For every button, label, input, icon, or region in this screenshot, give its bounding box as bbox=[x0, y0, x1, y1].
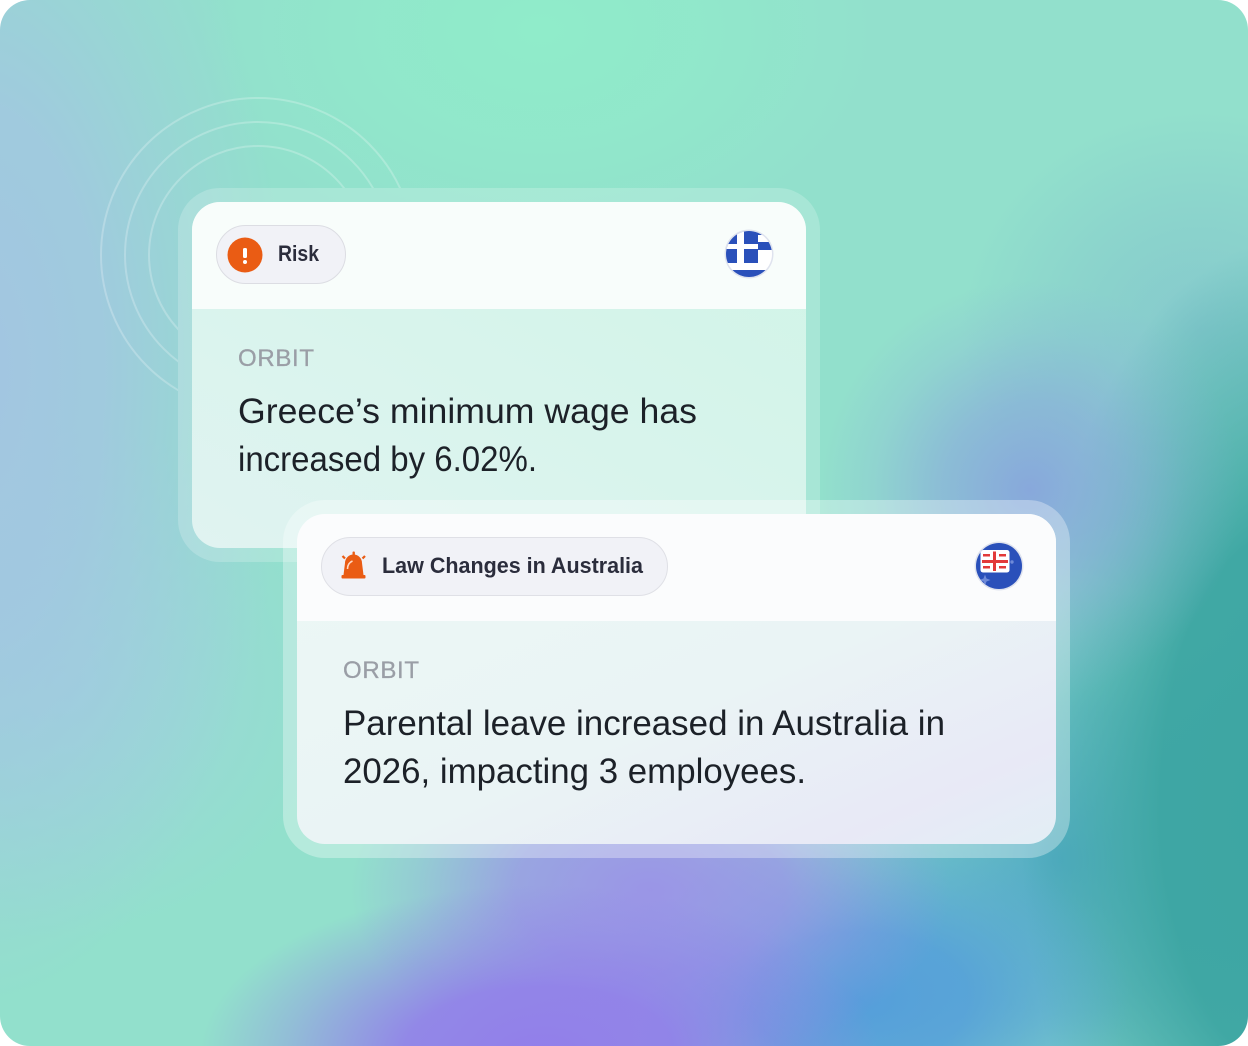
card 1 message bbox=[238, 392, 697, 479]
card 2 message: 2026, impacting 3 employees. bbox=[343, 752, 806, 791]
icon: siren bbox=[342, 552, 366, 578]
card 2 brand label: ORBIT bbox=[343, 657, 419, 684]
card 1 message: Greece’s minimum wage has bbox=[238, 392, 697, 431]
card 2 message: Parental leave increased in Australia in bbox=[343, 704, 945, 743]
card 2 header bbox=[297, 514, 1056, 621]
icon: Greece flag bbox=[724, 230, 774, 278]
risk badge bbox=[216, 226, 346, 284]
badge label: Risk: Risk bbox=[278, 241, 320, 266]
card 1 frame bbox=[178, 188, 820, 562]
card: Australia law change alert bbox=[283, 500, 1070, 858]
badge label: Law Changes in Australia: Law Changes in Australia bbox=[382, 553, 644, 578]
law changes badge bbox=[322, 538, 668, 596]
card 2 message bbox=[343, 704, 945, 791]
icon: Australia flag bbox=[974, 542, 1024, 590]
card 2 frame bbox=[283, 500, 1070, 858]
decorative radar rings bbox=[100, 97, 401, 391]
card 2 body bbox=[297, 514, 1056, 844]
card 1 body bbox=[192, 202, 806, 548]
card 1 brand label: ORBIT bbox=[238, 345, 314, 372]
icon: exclamation bbox=[228, 238, 262, 272]
card: Greece risk alert bbox=[178, 188, 820, 562]
card 1 message: increased by 6.02%. bbox=[238, 440, 537, 479]
card 1 header bbox=[192, 202, 806, 309]
